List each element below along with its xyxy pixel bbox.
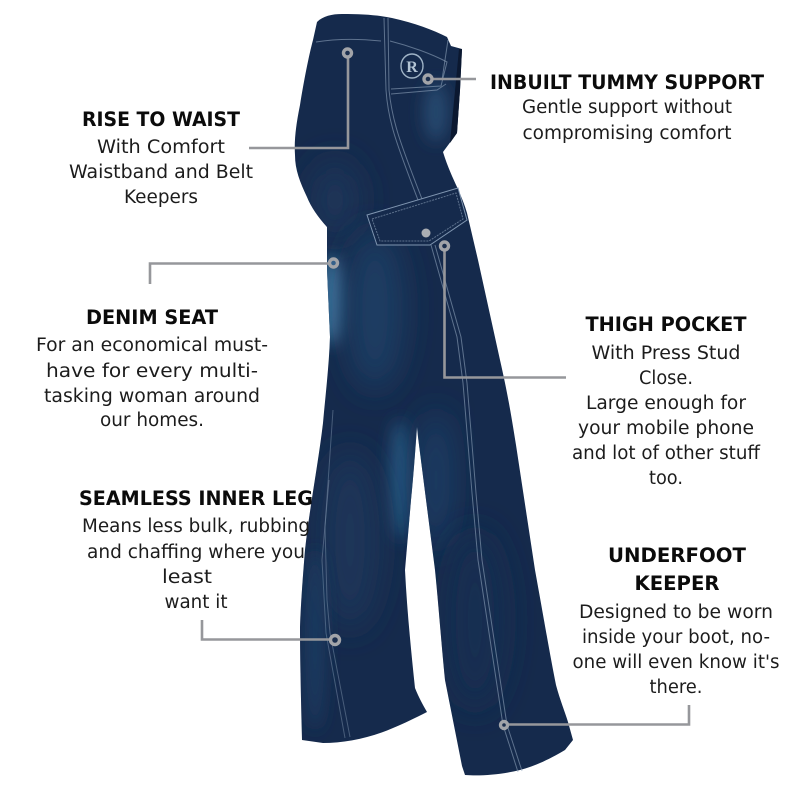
logo badge: R: [406, 59, 418, 76]
marker: [330, 636, 340, 644]
description: Means less bulk, rubbing: [82, 516, 310, 537]
description: and chaffing where you: [87, 542, 305, 563]
fly dark edge: [450, 49, 462, 143]
description: have for every multi-: [46, 361, 258, 382]
seat highlight: [320, 255, 344, 345]
description: [522, 97, 732, 144]
callout: underfoot keeper: [500, 544, 780, 728]
heading: KEEPER: [634, 572, 720, 595]
front leg mid tone: [434, 564, 451, 710]
back leg highlight: [390, 420, 410, 540]
marker: [440, 242, 448, 250]
heading: UNDERFOOT: [608, 544, 747, 567]
description: want it: [164, 592, 228, 613]
description: there.: [650, 677, 702, 698]
callout: inbuilt tummy support: [424, 71, 765, 144]
heading: RISE TO WAIST: [82, 108, 241, 131]
description: With Press Stud: [592, 343, 740, 364]
leader line: [432, 78, 476, 80]
description: Close.: [639, 368, 693, 389]
heading: SEAMLESS INNER LEG: [79, 487, 313, 510]
description: tasking woman around: [44, 386, 260, 407]
description: one will even know it's: [572, 652, 780, 673]
leader line: [249, 58, 348, 148]
leader line: [444, 251, 566, 378]
jeans illustration: [294, 14, 573, 776]
callout: thigh pocket: [440, 242, 760, 489]
back leg body: [320, 450, 380, 630]
description: Waistband and Belt: [69, 162, 253, 183]
description: inside your boot, no-: [582, 627, 770, 648]
description: Gentle support without: [522, 97, 732, 118]
heading: THIGH POCKET: [586, 313, 747, 336]
description: With Comfort: [97, 137, 225, 158]
description: For an economical must-: [36, 335, 268, 356]
leader line: [202, 620, 330, 640]
description: [572, 602, 780, 698]
description: [82, 516, 310, 613]
description: [36, 335, 268, 431]
heading: INBUILT TUMMY SUPPORT: [490, 71, 765, 94]
description: Large enough for: [586, 393, 747, 414]
thigh pocket flap: [367, 188, 467, 245]
description: our homes.: [100, 410, 204, 431]
stitching: inner leg seam: [322, 410, 350, 738]
leader line: [508, 705, 689, 724]
description: [572, 343, 760, 489]
description: compromising comfort: [522, 123, 732, 144]
description: Keepers: [124, 187, 198, 208]
description: your mobile phone: [578, 418, 754, 439]
back leg lower tone: [305, 550, 325, 730]
callout: rise to waist: [69, 49, 352, 208]
upper back tone: [298, 176, 352, 227]
heading: [608, 544, 747, 595]
heading: DENIM SEAT: [86, 306, 219, 329]
description: [69, 137, 253, 208]
stitching: waistband and pocket: [316, 39, 448, 94]
logo badge: [401, 54, 423, 78]
thigh back tone: [347, 230, 403, 390]
press stud: [422, 228, 430, 238]
marker: [424, 75, 432, 83]
callout: denim seat: [36, 259, 338, 431]
inner front leg: [421, 410, 451, 550]
fly lighter patch: [424, 82, 448, 142]
description: Designed to be worn: [579, 602, 773, 623]
description: too.: [649, 468, 683, 489]
marker: [500, 722, 508, 728]
description: and lot of other stuff: [572, 443, 760, 464]
stitching: side seam: [384, 18, 522, 772]
description: least: [162, 567, 212, 588]
callout: seamless inner leg: [79, 487, 340, 644]
marker: [330, 259, 338, 267]
marker: [344, 49, 352, 57]
leader line: [150, 264, 329, 284]
